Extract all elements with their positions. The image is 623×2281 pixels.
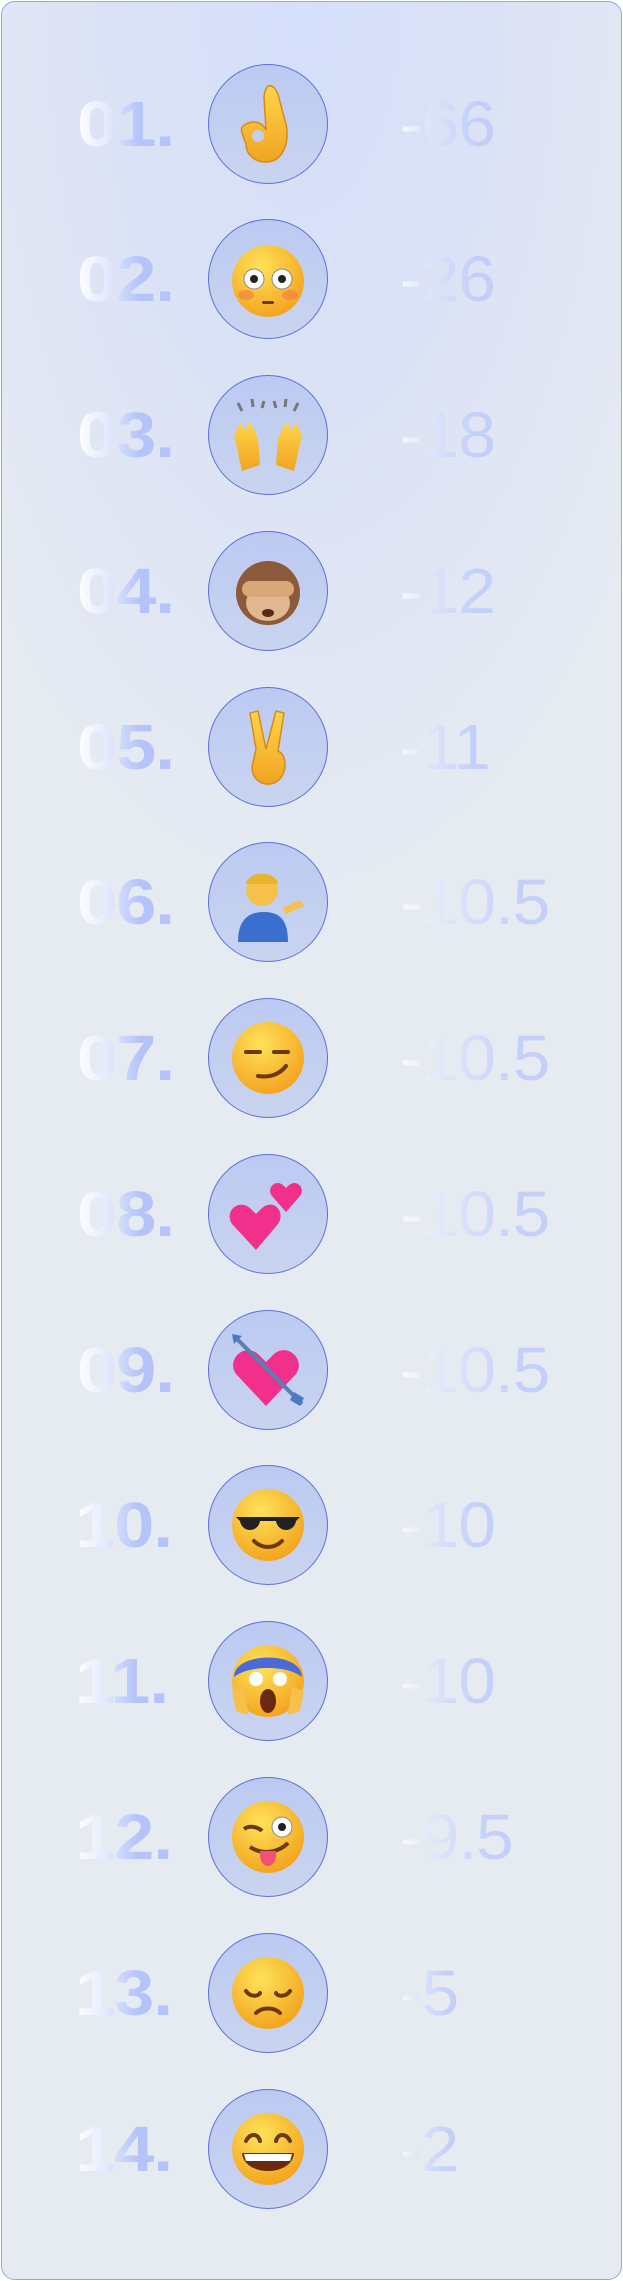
row 04 xyxy=(77,531,495,651)
value -18: -18 xyxy=(400,399,495,471)
value -12: -12 xyxy=(400,555,495,627)
row 08 xyxy=(77,1154,549,1274)
value -10: -10 xyxy=(400,1645,495,1717)
row 03 xyxy=(77,375,495,495)
value -10.5: -10.5 xyxy=(400,1022,549,1094)
rank number 02: 02. xyxy=(77,243,174,315)
rank number 08: 08. xyxy=(77,1178,174,1250)
rank number 09: 09. xyxy=(77,1334,174,1406)
row 09 xyxy=(77,1310,549,1430)
value -2: -2 xyxy=(400,2113,458,2185)
value -10: -10 xyxy=(400,1489,495,1561)
value -66: -66 xyxy=(400,88,495,160)
icon: person tipping hand xyxy=(208,842,328,962)
value -11: -11 xyxy=(400,711,490,783)
icon: see-no-evil monkey xyxy=(208,531,328,651)
value -9.5: -9.5 xyxy=(400,1801,513,1873)
value -10.5: -10.5 xyxy=(400,1178,549,1250)
rank number 06: 06. xyxy=(77,866,174,938)
row 02 xyxy=(77,219,495,339)
icon: smirking face xyxy=(208,998,328,1118)
row 11 xyxy=(75,1621,495,1741)
row 10 xyxy=(75,1465,495,1585)
icon: screaming face xyxy=(208,1621,328,1741)
rank number 12: 12. xyxy=(75,1801,172,1873)
row 13 xyxy=(75,1933,458,2053)
icon: sunglasses face xyxy=(208,1465,328,1585)
rank number 04: 04. xyxy=(77,555,174,627)
row 06 xyxy=(77,842,549,962)
rank number 11: 11. xyxy=(75,1645,168,1717)
rank number 01: 01. xyxy=(77,88,174,160)
icon: victory hand xyxy=(208,687,328,807)
icon: two hearts xyxy=(208,1154,328,1274)
icon: grinning face xyxy=(208,2089,328,2209)
rank number 05: 05. xyxy=(77,711,174,783)
icon: raising hands xyxy=(208,375,328,495)
rank number 13: 13. xyxy=(75,1957,172,2029)
rank number 07: 07. xyxy=(77,1022,174,1094)
row 12 xyxy=(75,1777,513,1897)
row 01 xyxy=(77,64,495,184)
rank number 10: 10. xyxy=(75,1489,172,1561)
value -10.5: -10.5 xyxy=(400,866,549,938)
row 14 xyxy=(75,2089,458,2209)
rank number 03: 03. xyxy=(77,399,174,471)
icon: heart with arrow xyxy=(208,1310,328,1430)
icon: flushed face xyxy=(208,219,328,339)
value -5: -5 xyxy=(400,1957,458,2029)
row 07 xyxy=(77,998,549,1118)
value -10.5: -10.5 xyxy=(400,1334,549,1406)
rank number 14: 14. xyxy=(75,2113,172,2185)
icon: winking face with tongue xyxy=(208,1777,328,1897)
icon: ok hand xyxy=(208,64,328,184)
value -26: -26 xyxy=(400,243,495,315)
icon: disappointed face xyxy=(208,1933,328,2053)
row 05 xyxy=(77,687,490,807)
